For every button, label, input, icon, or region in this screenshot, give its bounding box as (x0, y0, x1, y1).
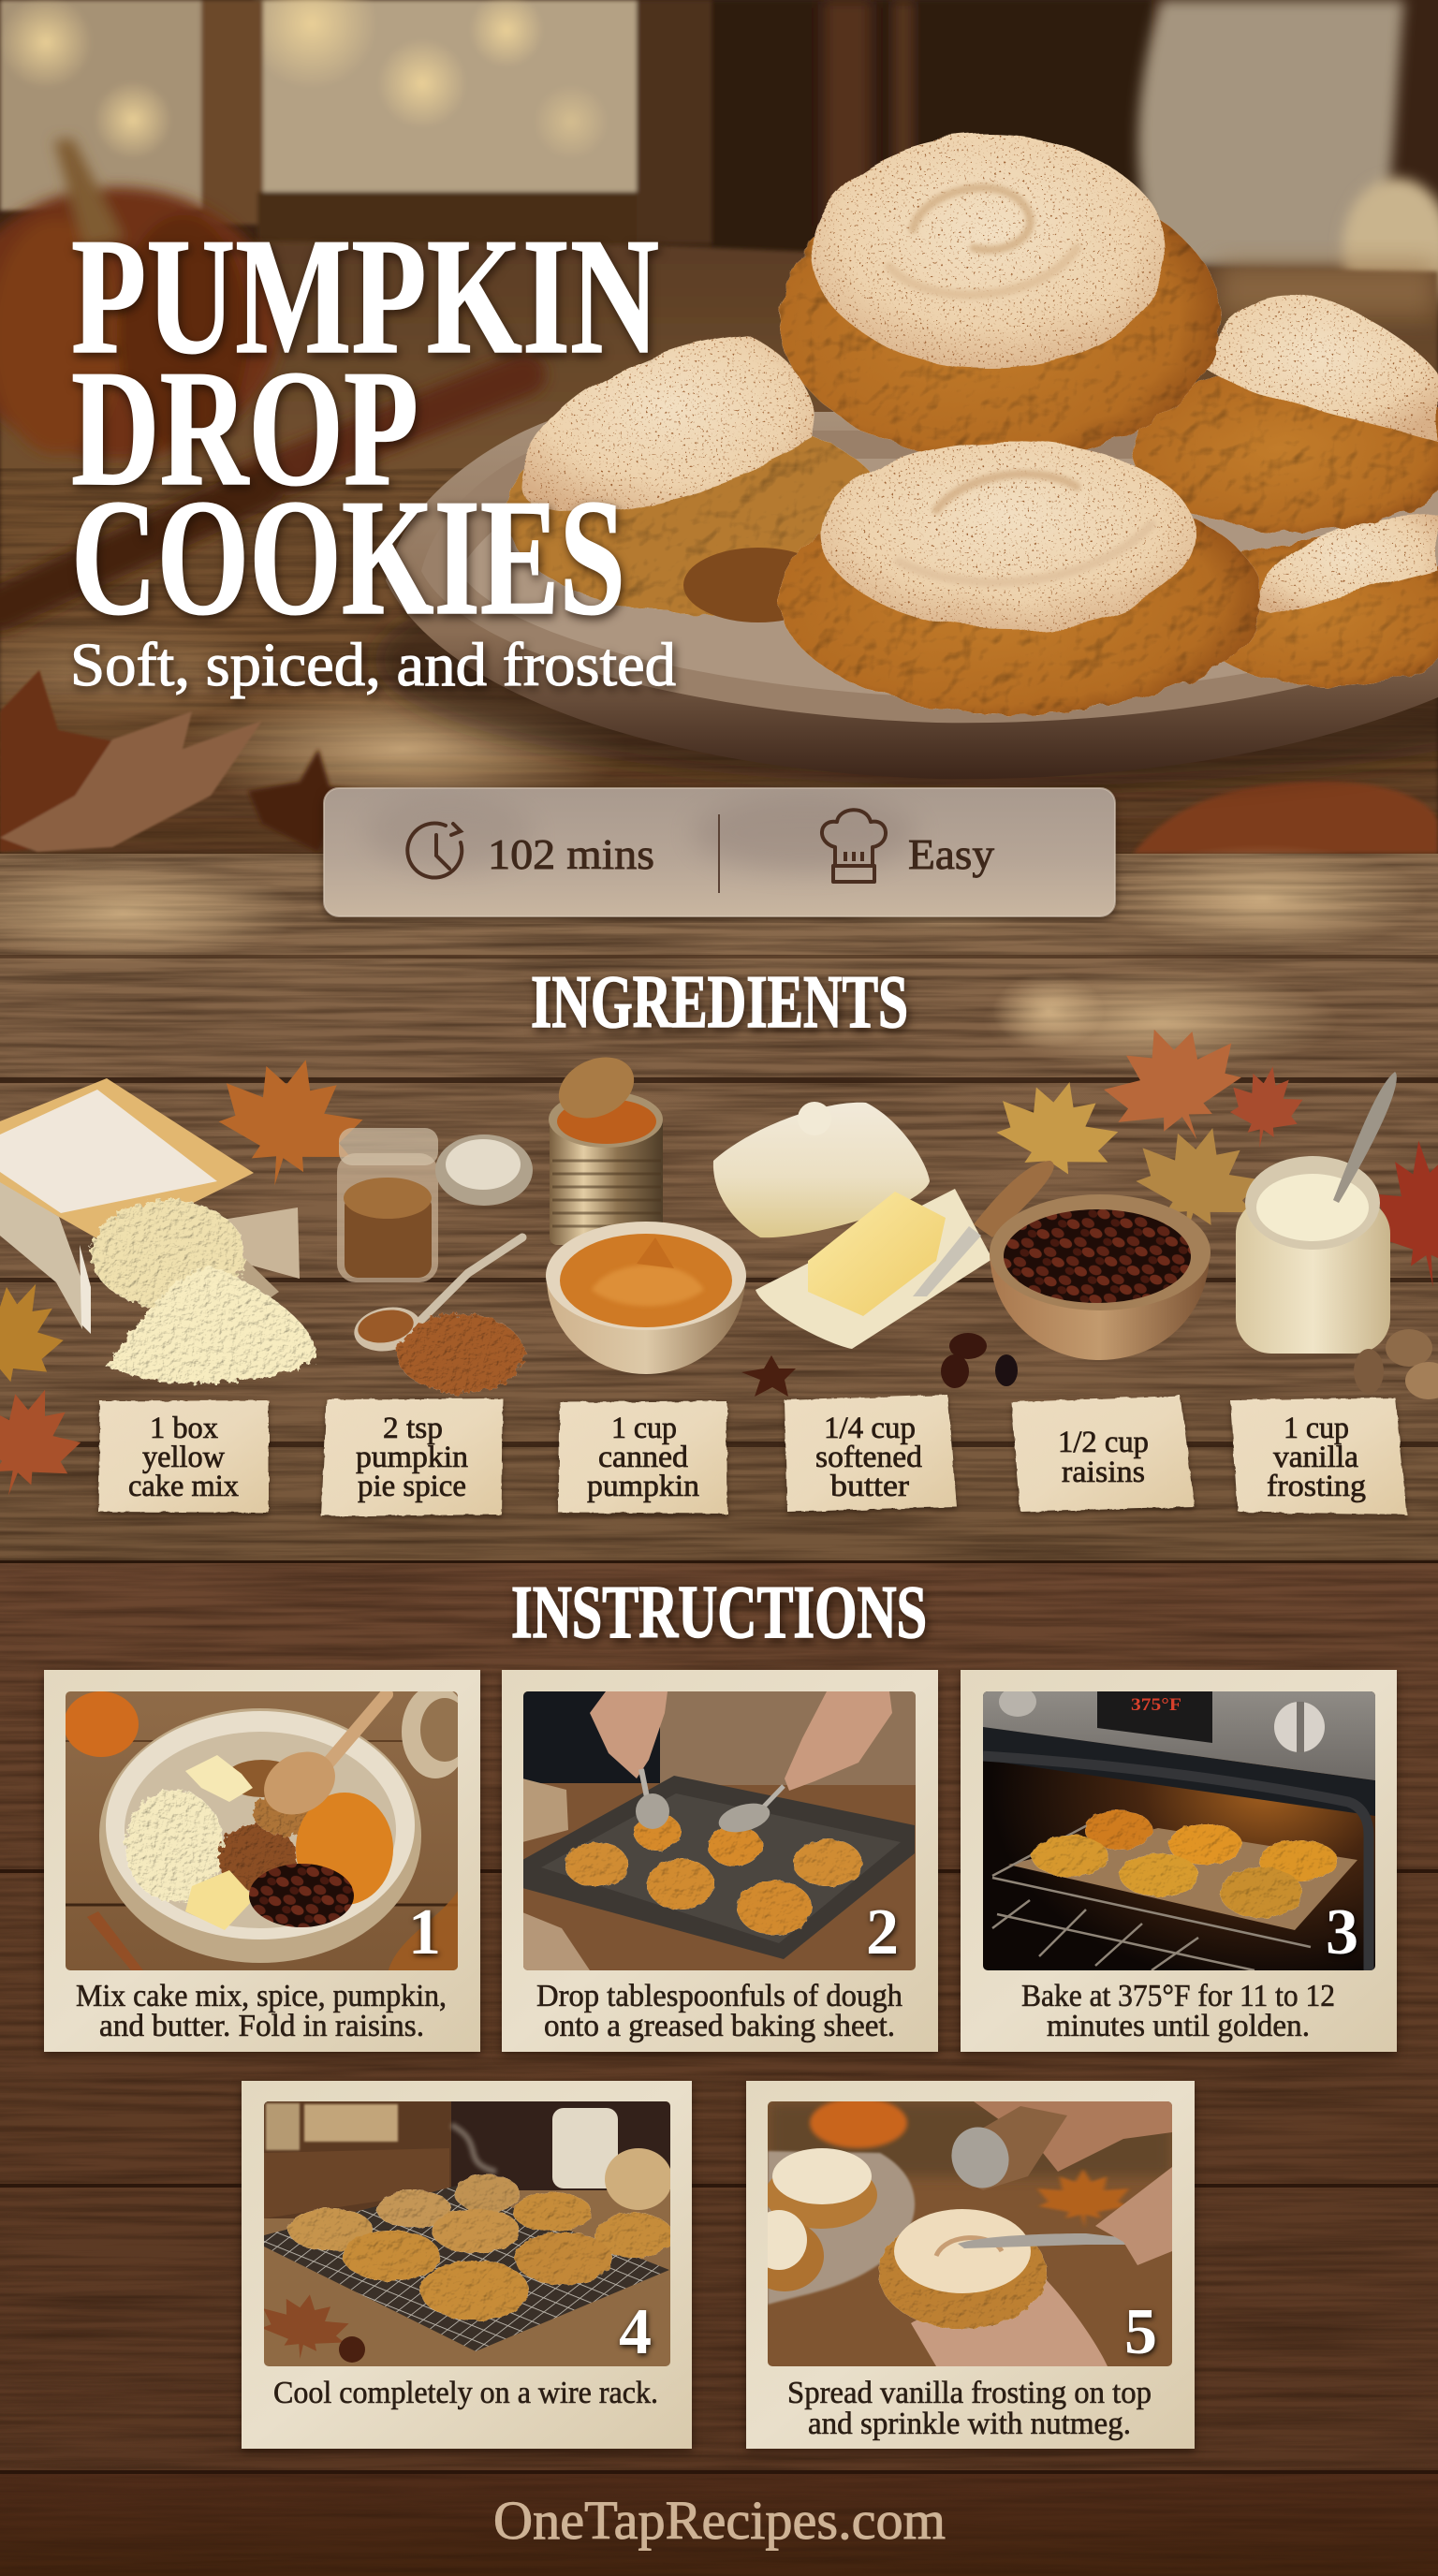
ingredient tag: butter: 1/4 cup (824, 1412, 916, 1445)
cinnamon pile (397, 1314, 524, 1393)
panel: hero photo of frosted cookies (0, 0, 1438, 854)
window with bokeh light (0, 0, 1152, 262)
ingredient tag: frosting: 1 cup (1284, 1412, 1349, 1445)
bowl of raisins (990, 1194, 1211, 1360)
step 3 caption: minutes until golden. (1047, 2009, 1310, 2043)
cookie lower right (1189, 515, 1438, 686)
cookie front (779, 442, 1262, 715)
icon: clock (407, 824, 462, 878)
step card 1 (44, 1670, 480, 2052)
dried leaf (0, 670, 262, 852)
icon: chef hat (822, 810, 886, 882)
cookie left (506, 335, 889, 613)
ingredient tag: pumpkin: canned (598, 1441, 689, 1474)
step 3 caption (1021, 1979, 1335, 2043)
cookie back small (683, 548, 833, 622)
step 5 photo: frosting cookie (745, 2098, 1172, 2366)
loose raisins (941, 1333, 1018, 1388)
ingredient tag: pumpkin: pumpkin (587, 1470, 699, 1503)
step 3 photo: oven (983, 1687, 1375, 1970)
ingredient tag: spice: 2 tsp (383, 1412, 443, 1445)
title: PUMPKIN (71, 203, 659, 388)
ingredient tag: pumpkin: 1 cup (611, 1412, 677, 1445)
badge: time and difficulty (324, 788, 1115, 916)
spoon with spice (351, 1237, 522, 1356)
step 5 caption (787, 2376, 1152, 2441)
step number: 4 (619, 2296, 652, 2368)
step card 4 (242, 2081, 692, 2449)
ingredient tag: raisins (1011, 1396, 1195, 1512)
ingredient tag: spice: pie spice (358, 1470, 466, 1503)
heading: instructions: INSTRUCTIONS (511, 1572, 927, 1654)
blurred pumpkin (0, 139, 281, 459)
step 5 caption: Spread vanilla frosting on top (787, 2376, 1152, 2410)
step card 5 (745, 2081, 1195, 2449)
bowl of pumpkin (546, 1222, 746, 1374)
ingredient tag: butter: butter (830, 1470, 909, 1503)
ingredient tag: pumpkin (558, 1401, 727, 1514)
leaf cluster (0, 1006, 1438, 1513)
step 1 caption: Mix cake mix, spice, pumpkin, (76, 1979, 447, 2013)
step 1 photo: mixing bowl (64, 1685, 469, 1970)
ingredient tag: frosting (1230, 1398, 1407, 1515)
yellow cake mix powder (92, 1200, 316, 1383)
butter plate and knife (756, 1161, 1054, 1349)
cookies with frosting (506, 135, 1438, 715)
ingredient tag: cake mix: 1 box (150, 1412, 218, 1445)
ingredient tag: raisins: 1/2 cup (1058, 1426, 1149, 1459)
step 3 caption: Bake at 375°F for 11 to 12 (1021, 1979, 1335, 2013)
star anise (741, 1355, 796, 1397)
time text: 102 mins (488, 830, 654, 878)
ingredient tag: spice: pumpkin (356, 1441, 468, 1474)
table top (0, 239, 1438, 854)
step 1 caption: and butter. Fold in raisins. (99, 2009, 424, 2043)
step card 3 (961, 1670, 1397, 2052)
step 2 caption: onto a greased baking sheet. (544, 2009, 895, 2043)
ingredient tag: cake mix: yellow (142, 1441, 225, 1474)
title: DROP (71, 335, 418, 520)
step 2 photo: dropping dough on tray (522, 1691, 916, 1970)
can of pumpkin (549, 1046, 663, 1245)
ginger root (1354, 1329, 1438, 1399)
ingredient tag: cake mix: cake mix (128, 1470, 239, 1503)
jar of vanilla frosting (1236, 1072, 1397, 1354)
step number: 1 (408, 1896, 441, 1969)
plate (374, 412, 1438, 786)
step card 2 (502, 1670, 938, 2052)
cake mix box (0, 1078, 300, 1334)
orange cloth (1133, 782, 1438, 854)
pitcher in background (1138, 0, 1404, 267)
title (71, 203, 659, 650)
cookie top (779, 135, 1221, 461)
step number: 3 (1326, 1896, 1358, 1969)
step 2 caption (536, 1979, 902, 2043)
ingredient tag: frosting: frosting (1267, 1470, 1366, 1503)
panel: ingredients wood background (0, 844, 1438, 1565)
step 5 caption: and sprinkle with nutmeg. (808, 2407, 1131, 2441)
footer website text: OneTapRecipes.com (493, 2490, 946, 2551)
ingredient tag: butter (785, 1395, 957, 1512)
panel: instructions wood background (0, 1563, 1438, 2473)
title: COOKIES (71, 464, 625, 650)
jar lid (435, 1134, 533, 1206)
step number: 5 (1124, 2296, 1157, 2368)
ingredient tag: frosting: vanilla (1273, 1441, 1358, 1474)
heading: ingredients: INGREDIENTS (531, 961, 908, 1044)
step 4 photo: cooling rack (256, 2101, 673, 2366)
small white pumpkin (1343, 178, 1438, 318)
cookie right (1133, 296, 1438, 532)
oven display: 375°F (1131, 1695, 1181, 1715)
cinnamon sticks (0, 374, 524, 608)
step 2 caption: Drop tablespoonfuls of dough (536, 1979, 902, 2013)
butter dish lid (713, 1102, 930, 1237)
ingredient tag: cake mix (98, 1400, 269, 1513)
ingredient tag: spice (321, 1398, 503, 1516)
step number: 2 (866, 1896, 899, 1969)
ingredient tag: raisins: raisins (1062, 1456, 1145, 1489)
subtitle: Soft, spiced, and frosted (70, 631, 676, 699)
footer bar (0, 2470, 1438, 2576)
step 1 caption (76, 1979, 447, 2043)
star anise (247, 748, 358, 852)
ingredient tag: butter: softened (815, 1441, 923, 1474)
step 4 caption: Cool completely on a wire rack. (273, 2376, 658, 2410)
spice jar (337, 1128, 438, 1282)
difficulty text: Easy (908, 830, 994, 878)
